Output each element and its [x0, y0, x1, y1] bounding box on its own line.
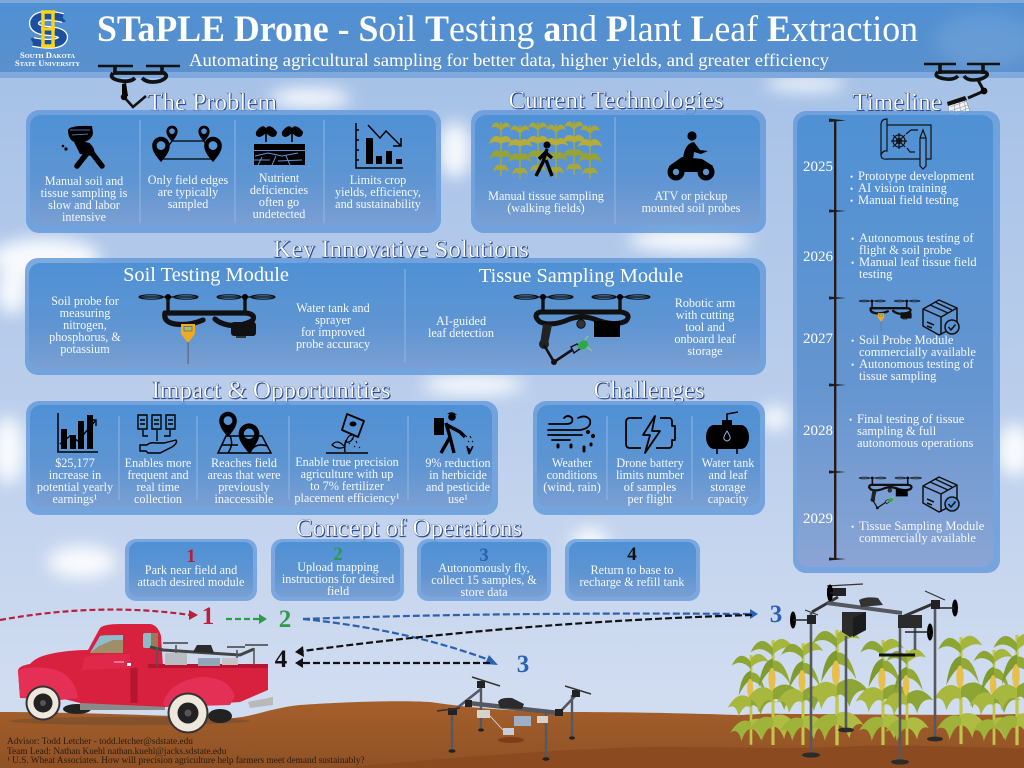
heading: The Problem: The Problem: [147, 89, 277, 116]
text: earnings: $25,177: [55, 456, 95, 470]
panel: timeline: [793, 111, 1000, 573]
text: manual sampling: slow and labor: [48, 198, 120, 212]
text: herbicide reduction: use¹: [448, 492, 468, 506]
card: step 1: 1: [186, 546, 196, 567]
icon: soil testing drone: [139, 294, 275, 364]
text: field edges: sampled: [168, 197, 208, 211]
icon: map with pins: [218, 412, 271, 453]
text: AI-guided: leaf detection: [428, 326, 494, 340]
icon: declining bar chart: [356, 123, 403, 168]
card: step 1: [125, 539, 257, 601]
text: 2026 items: flight & soil probe: [859, 243, 952, 257]
icon: person walking: [536, 142, 552, 176]
text: 2025 items: •: [850, 184, 853, 194]
panel: the problem: [26, 110, 441, 233]
text: storage capacity: capacity: [708, 492, 749, 506]
label: 4: 4: [275, 646, 288, 673]
footer credits: Advisor: Todd Letcher - todd.letcher@sdstate.edu: [7, 737, 193, 747]
card: step 3: collect 15 samples, &: [431, 573, 537, 587]
text: frequent collection: real time: [137, 480, 179, 494]
large drone over corn: [790, 584, 958, 765]
text: limits: and sustainability: [335, 197, 422, 211]
text: soil probe: Soil probe for: [51, 294, 119, 308]
text: manual tissue sampling: Manual tissue sampling: [488, 189, 604, 203]
text: field areas: Reaches field: [211, 456, 277, 470]
card: step 4: [565, 539, 700, 601]
text: robotic arm: tool and: [685, 320, 725, 334]
text: manual tissue sampling: (walking fields): [507, 201, 585, 215]
arrow: blue to ground drone: [303, 619, 498, 665]
panel: challenges: [533, 401, 765, 515]
card: step 3: store data: [460, 585, 508, 599]
text: 2025 items: AI vision training: [858, 181, 948, 195]
text: storage capacity: Water tank: [702, 456, 754, 470]
text: field edges: are typically: [158, 185, 219, 199]
text: precision agriculture: to 7% fertilizer: [310, 479, 384, 493]
text: soil probe: measuring: [60, 306, 110, 320]
heading: Timeline: Timeline: [852, 89, 942, 116]
text: precision agriculture: placement efficiency¹: [294, 491, 400, 505]
text: 2026 items: testing: [859, 267, 893, 281]
text: limits: yields, efficiency,: [335, 185, 421, 199]
card: step 4: Return to base to: [591, 563, 673, 577]
drone on truck bed: [150, 643, 268, 667]
card: step 2: instructions for desired: [282, 572, 394, 586]
card: step 1: Park near field and: [145, 563, 237, 577]
icon: wind and rain: [548, 416, 594, 451]
text: 2027 items: •: [851, 336, 854, 346]
icon: tissue sampling drone: [514, 294, 650, 365]
card: step 2: field: [327, 584, 349, 598]
subtitle: Automating agricultural sampling for better data, higher yields, and greater efficiency: [189, 50, 829, 70]
text: 2028 items: Final testing of tissue: [857, 412, 965, 426]
timeline axis: [829, 118, 846, 560]
corn row: [728, 629, 1024, 745]
text: robotic arm: with cutting: [676, 308, 734, 322]
panel: key innovative solutions: [25, 258, 766, 375]
icon: ATV rider: [668, 131, 714, 180]
text: 2026 items: •: [851, 258, 854, 268]
year 2025: 2025: [803, 159, 833, 175]
text: herbicide reduction: in herbicide: [429, 468, 487, 482]
label: 3 near: 3: [517, 651, 529, 678]
card: step 3: [417, 539, 551, 601]
arrow: red to step 1: [0, 610, 198, 620]
icon: documents in hand: [138, 415, 176, 453]
text: 2027 items: Soil Probe Module: [859, 333, 954, 347]
text: manual sampling: Manual soil and: [45, 174, 123, 188]
icon: battery: [626, 416, 675, 453]
icon: tissue drone: [859, 477, 922, 509]
text: limits: Limits crop: [350, 173, 406, 187]
sub-heading: soil testing module: Soil Testing Module: [123, 264, 289, 286]
text: frequent collection: frequent and: [127, 468, 189, 482]
text: battery: of samples: [624, 480, 676, 494]
icon: package: [923, 477, 959, 512]
text: 2027 items: Autonomous testing of: [859, 357, 974, 371]
text: 2026 items: Manual leaf tissue field: [859, 255, 977, 269]
text: field areas: areas that were: [207, 468, 281, 482]
text: field edges: Only field edges: [148, 173, 228, 187]
text: battery: per flight: [627, 492, 673, 506]
text: nutrient deficiencies: Nutrient: [259, 171, 299, 185]
icon: worker carrying load: [62, 126, 102, 166]
text: 2028 items: sampling & full: [857, 424, 937, 438]
text: soil probe: nitrogen,: [63, 318, 107, 332]
logo: SDSU: South Dakota: [20, 51, 76, 60]
text: 2027 items: tissue sampling: [859, 369, 937, 383]
text: earnings: potential yearly: [37, 480, 114, 494]
text: 2029 items: •: [851, 522, 854, 532]
text: robotic arm: Robotic arm: [675, 296, 735, 310]
text: 2026 items: Autonomous testing of: [859, 231, 974, 245]
icon: soil drone: [859, 300, 920, 331]
truck: [10, 624, 273, 734]
text: manual sampling: intensive: [62, 210, 106, 224]
text: weather: (wind, rain): [543, 480, 601, 494]
text: nutrient deficiencies: deficiencies: [250, 183, 308, 197]
heading: Impact & Opportunities: Impact & Opportunities: [152, 377, 390, 404]
text: field areas: inaccessible: [215, 492, 273, 506]
text: water tank: probe accuracy: [296, 337, 371, 351]
panel: impact and opportunities: [26, 401, 498, 515]
title: STaPLE Drone - Soil Testing and Plant Leaf Extraction: [97, 9, 918, 50]
icon: map pins on field edges: [152, 126, 222, 162]
text: storage capacity: storage: [710, 480, 746, 494]
footer credits: ¹ U.S. Wheat Associates. How will precision agriculture help farmers meet demand sustainably?: [7, 755, 365, 766]
text: AI-guided: AI-guided: [436, 314, 486, 328]
card: step 1: attach desired module: [138, 575, 244, 589]
year 2028: 2028: [803, 423, 833, 439]
arrow: black return from ground drone: [295, 658, 490, 668]
text: 2026 items: •: [851, 234, 854, 244]
card: step 4: 4: [627, 544, 637, 565]
text: 2028 items: autonomous operations: [857, 436, 973, 450]
logo: SDSU: [15, 11, 81, 68]
text: 2025 items: Manual field testing: [858, 193, 959, 207]
text: battery: Drone battery: [616, 456, 684, 470]
text: herbicide reduction: and pesticide: [426, 480, 490, 494]
text: frequent collection: Enables more: [125, 456, 191, 470]
arrow: green to step 2: [226, 614, 267, 624]
text: 2025 items: Prototype development: [858, 169, 975, 183]
icon: calendar: [947, 96, 970, 118]
text: storage capacity: and leaf: [709, 468, 748, 482]
arrow: blue to far field: [303, 609, 758, 619]
text: robotic arm: onboard leaf: [674, 332, 737, 346]
decorative drone: left, arm pointing at The Problem: [98, 66, 180, 107]
card: step 3: Autonomously fly,: [438, 561, 530, 575]
text: 2028 items: •: [849, 415, 852, 425]
icon: corn field: [489, 121, 602, 179]
card: step 2: 2: [333, 544, 343, 565]
text: weather: Weather: [552, 456, 592, 470]
text: field areas: previously: [218, 480, 271, 494]
text: 2025 items: •: [850, 172, 853, 182]
heading: Challenges: Challenges: [593, 377, 705, 404]
text: precision agriculture: agriculture with up: [301, 467, 393, 481]
year 2026: 2026: [803, 249, 834, 265]
text: water tank: for improved: [301, 325, 365, 339]
card: step 3: 3: [479, 545, 489, 566]
footer credits: [7, 737, 365, 766]
decorative drone: right, holding calendar: [924, 64, 1000, 118]
year 2027: 2027: [803, 331, 834, 347]
icon: rising chart: [58, 413, 98, 452]
text: 2029 items: commercially available: [859, 531, 976, 545]
text: nutrient deficiencies: often go: [259, 195, 299, 209]
arrow: black return from far field: [295, 615, 752, 657]
card: step 2: Upload mapping: [297, 560, 379, 574]
header band: [0, 0, 1024, 78]
text: water tank: Water tank and: [296, 301, 370, 315]
text: herbicide reduction: 9% reduction: [425, 456, 491, 470]
text: precision agriculture: Enable true precision: [295, 455, 399, 469]
icon: blueprint: [881, 119, 931, 169]
icon: person spraying: [434, 412, 473, 454]
sub-heading: tissue sampling module: Tissue Sampling Module: [479, 265, 683, 287]
icon: seed bag and sprout: [326, 414, 368, 453]
text: soil probe: phosphorus, &: [49, 330, 121, 344]
text: frequent collection: collection: [134, 492, 182, 506]
ground: [0, 701, 1024, 768]
text: earnings: earnings¹: [53, 492, 98, 506]
text: earnings: increase in: [49, 468, 101, 482]
text: 2027 items: •: [851, 360, 854, 370]
text: robotic arm: storage: [687, 344, 723, 358]
year 2029: 2029: [803, 511, 833, 527]
text: 2027 items: commercially available: [859, 345, 976, 359]
label: 2: 2: [279, 606, 291, 633]
text: soil probe: potassium: [60, 342, 110, 356]
label: 1: 1: [202, 603, 214, 630]
footer credits: Team Lead: Nathan Kuehl nathan.kuehl@jacks.sdstate.edu: [7, 747, 227, 757]
icon: water tank: [706, 412, 749, 454]
heading: Concept of Operations: Concept of Operations: [296, 515, 522, 542]
icon: nutrient soil: [254, 126, 305, 165]
panel: current technologies: [471, 110, 766, 233]
text: battery: limits number: [616, 468, 684, 482]
heading: Current Technologies: Current Technologies: [508, 87, 724, 114]
label: 3 far: 3: [770, 601, 782, 628]
text: ATV probes: mounted soil probes: [642, 201, 741, 215]
icon: package: [923, 300, 959, 335]
text: water tank: sprayer: [315, 313, 351, 327]
text: 2025 items: •: [850, 196, 853, 206]
drone on ground: [437, 677, 591, 761]
heading: Key Innovative Solutions: Key Innovative Solutions: [273, 236, 529, 263]
text: manual sampling: tissue sampling is: [41, 186, 128, 200]
card: step 4: recharge & refill tank: [579, 575, 685, 589]
card: step 2: [271, 539, 404, 601]
text: ATV probes: ATV or pickup: [655, 189, 727, 203]
logo: SDSU: State University: [15, 59, 81, 68]
text: weather: conditions: [547, 468, 598, 482]
text: nutrient deficiencies: undetected: [253, 207, 305, 221]
text: 2029 items: Tissue Sampling Module: [859, 519, 985, 533]
